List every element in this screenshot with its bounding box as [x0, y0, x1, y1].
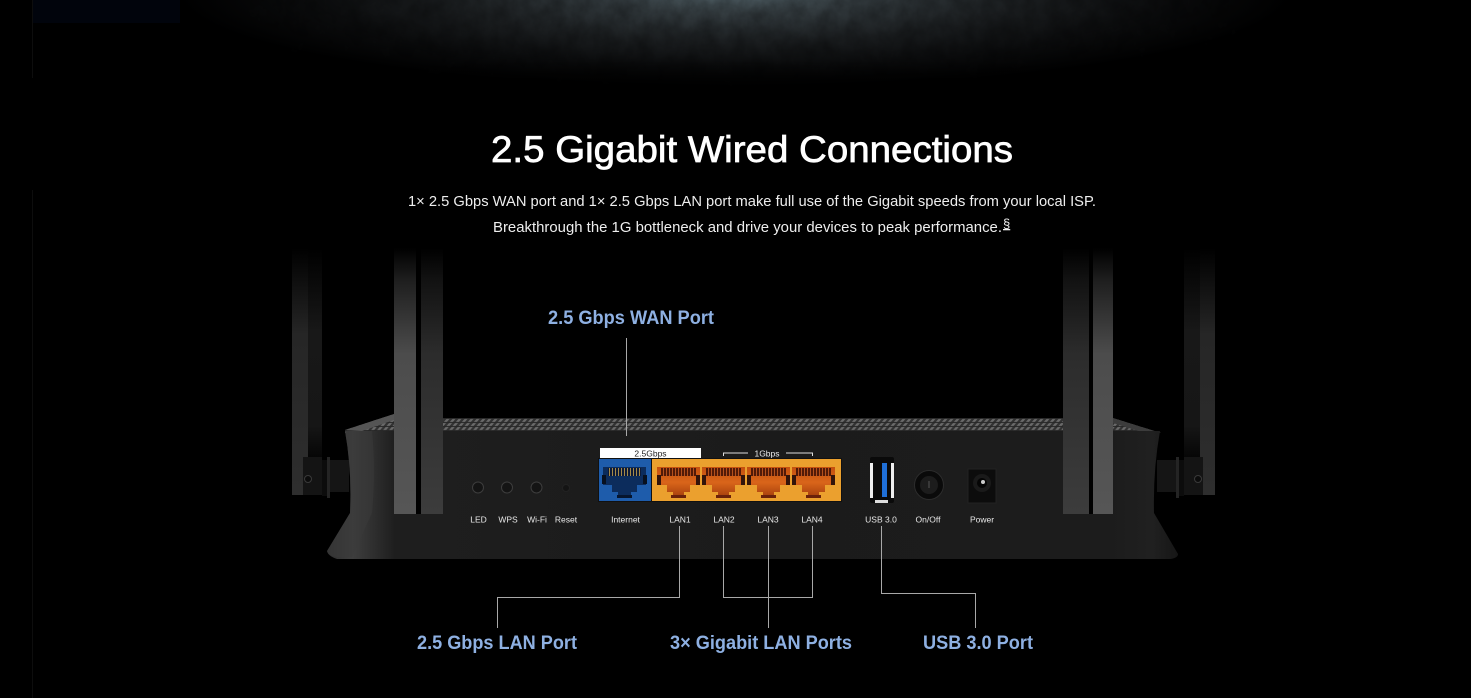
- WAN port block: [598, 458, 652, 502]
- port labels: LAN4: [801, 514, 823, 524]
- 1Gbps marker: 1Gbps: [754, 448, 780, 458]
- callout labels: USB 3.0 Port: [923, 633, 1034, 654]
- LAN3 socket: [747, 467, 790, 498]
- callout labels: 3× Gigabit LAN Ports: [670, 633, 852, 654]
- port labels: LAN3: [757, 514, 779, 524]
- callout labels: 2.5 Gbps LAN Port: [417, 633, 578, 654]
- router illustration: [292, 248, 1215, 559]
- back left antenna: [292, 248, 349, 498]
- description text: §: [1003, 216, 1010, 231]
- callout labels: 2.5 Gbps WAN Port: [548, 308, 715, 329]
- status buttons: [472, 482, 570, 493]
- port labels: [470, 514, 994, 524]
- 2.5Gbps marker: [600, 448, 701, 458]
- USB port: [870, 457, 894, 503]
- LAN port block: [652, 458, 842, 502]
- back right antenna: [1157, 248, 1215, 498]
- on/off button: [914, 470, 944, 500]
- callout labels: [417, 308, 1034, 654]
- power socket: [968, 469, 996, 503]
- port labels: LED: [470, 514, 487, 524]
- description text: 1× 2.5 Gbps WAN port and 1× 2.5 Gbps LAN port make full use of the Gigabit speeds from your local ISP.: [408, 194, 1096, 210]
- title: 2.5 Gigabit Wired Connections: [491, 129, 1013, 170]
- 2.5Gbps marker: 2.5Gbps: [634, 448, 667, 458]
- LAN2 socket: [702, 467, 745, 498]
- faint navy corner block: [33, 0, 180, 23]
- port labels: Wi-Fi: [527, 514, 547, 524]
- port labels: Power: [970, 514, 994, 524]
- port labels: WPS: [498, 514, 518, 524]
- description text: Breakthrough the 1G bottleneck and drive your devices to peak performance.: [493, 220, 1002, 236]
- textured rock glow at top: [165, 0, 1305, 95]
- port labels: On/Off: [916, 514, 941, 524]
- port labels: USB 3.0: [865, 514, 897, 524]
- port labels: LAN1: [669, 514, 691, 524]
- router body: [327, 431, 1178, 559]
- LAN1 socket: [657, 467, 700, 498]
- front right antenna: [1063, 248, 1113, 514]
- description text: [408, 194, 1096, 236]
- port labels: LAN2: [713, 514, 735, 524]
- front left antenna: [394, 248, 443, 514]
- router top grille: [345, 414, 1161, 433]
- port labels: Reset: [555, 514, 578, 524]
- port labels: Internet: [611, 514, 641, 524]
- 1Gbps marker: [724, 448, 812, 458]
- LAN4 socket: [792, 467, 835, 498]
- leader lines: [498, 338, 976, 628]
